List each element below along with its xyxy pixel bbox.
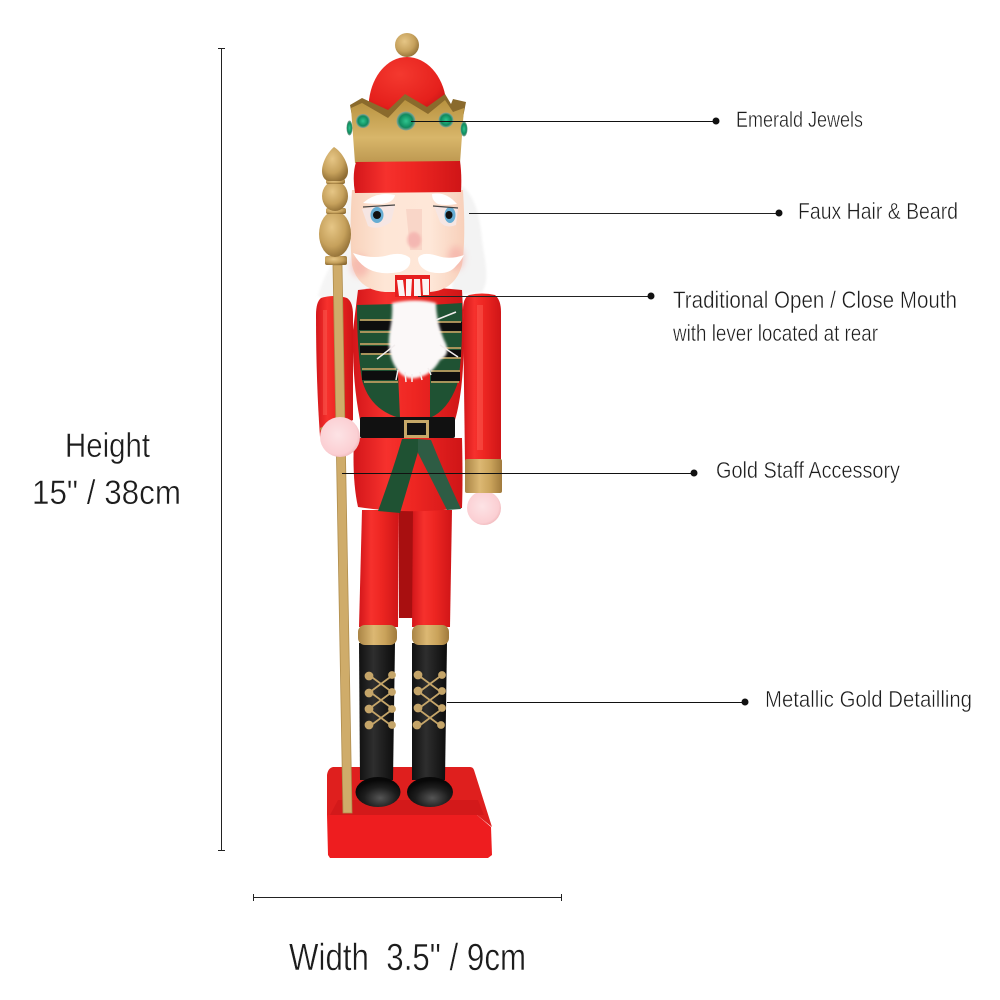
- callout: gold staff accessory: Gold Staff Accessory: [716, 457, 900, 483]
- nose: [406, 209, 422, 250]
- belt: [360, 417, 455, 438]
- callout: faux hair and beard: Faux Hair & Beard: [798, 198, 958, 224]
- callout: traditional open and close mouth: with lever located at rear: [672, 320, 878, 346]
- callout: metallic gold detailling: Metallic Gold Detailling: [765, 686, 972, 712]
- gold crown: [351, 100, 464, 163]
- crown hat: [346, 33, 468, 193]
- red hat band: [354, 161, 461, 193]
- left leg: [359, 510, 399, 627]
- callout: metallic gold detailling: [447, 686, 972, 712]
- callout: traditional open and close mouth: Traditional Open / Close Mouth: [673, 287, 957, 314]
- cheek blush: [351, 246, 464, 277]
- emerald jewels: [346, 112, 468, 136]
- jacket: [353, 287, 464, 513]
- callout: emerald jewels: [411, 107, 863, 132]
- callout: gold staff accessory: [342, 457, 900, 483]
- eyebrows: [363, 193, 457, 205]
- right leg: [412, 510, 452, 627]
- open mouth with teeth: [395, 275, 430, 297]
- back support under jacket: [399, 510, 413, 618]
- faux hair at sides of head: [318, 186, 486, 310]
- right eye: [433, 206, 458, 226]
- belt buckle: [406, 422, 428, 436]
- callout: emerald jewels: Emerald Jewels: [736, 107, 863, 132]
- hat knob: [395, 33, 419, 57]
- right boot: [407, 625, 453, 807]
- width label: Width 3.5" / 9cm: [289, 937, 526, 979]
- width dimension line: [253, 894, 562, 901]
- right arm with cuff and hand: [463, 294, 502, 525]
- head and face: [350, 190, 464, 297]
- height dimension line: [218, 48, 225, 850]
- black and gold chest stripes: [359, 321, 462, 381]
- height label: Height: [65, 427, 150, 465]
- left boot: [356, 625, 400, 807]
- left arm sleeve: [316, 296, 353, 450]
- moustache: [353, 253, 464, 273]
- nutcracker figure: [316, 33, 502, 858]
- beard: [377, 300, 458, 382]
- green tunic panels: [357, 304, 400, 418]
- height label: [32, 427, 181, 512]
- wooden base: [327, 767, 492, 858]
- gold staff accessory: [319, 147, 352, 813]
- height label: 15" / 38cm: [32, 474, 181, 512]
- left hand over staff: [320, 417, 360, 457]
- callout: faux hair and beard: [469, 198, 958, 224]
- left eye: [362, 205, 395, 228]
- green coat tails: [378, 439, 418, 513]
- callout: traditional open and close mouth: [418, 287, 957, 346]
- inner crown rim: [350, 94, 466, 128]
- red dome: [369, 57, 446, 115]
- staff finial: [319, 147, 351, 265]
